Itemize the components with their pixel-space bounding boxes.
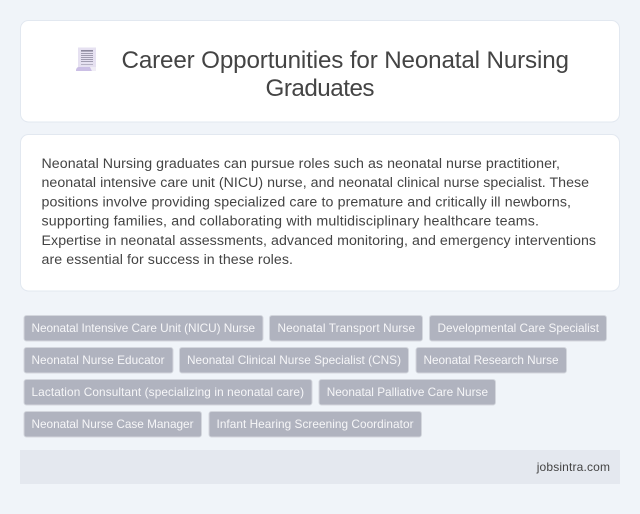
tag: case manager: Neonatal Nurse Case Manager	[32, 417, 194, 431]
tag: research nurse: Neonatal Research Nurse	[424, 353, 559, 367]
text block: description paragraph: supporting families, and collaborating with multidisciplinary healthcare teams.	[42, 214, 539, 230]
panel: description text card	[20, 134, 620, 291]
text block: description paragraph: positions involve providing specialized care to premature and critically ill newborns,	[42, 194, 571, 210]
text block: description paragraph: Neonatal Nursing graduates can pursue roles such as neonatal nurse practitioner,	[42, 156, 560, 172]
tag: research nurse	[416, 348, 566, 373]
icon: paper scroll document	[76, 48, 96, 71]
tag: nurse educator	[24, 348, 173, 373]
tag: NICU nurse	[24, 316, 263, 341]
tag: developmental care specialist	[430, 316, 606, 341]
title: Graduates	[266, 75, 374, 102]
title	[122, 47, 569, 102]
tag: clinical nurse specialist: Neonatal Clinical Nurse Specialist (CNS)	[187, 353, 401, 367]
tag: developmental care specialist: Developmental Care Specialist	[438, 321, 600, 335]
title: Career Opportunities for Neonatal Nursing	[122, 47, 569, 74]
tag: transport nurse: Neonatal Transport Nurse	[278, 321, 415, 335]
text block: description paragraph: neonatal intensive care unit (NICU) nurse, and neonatal clinical nurse specialist. These	[42, 175, 589, 191]
text block: description paragraph	[42, 156, 596, 268]
tag: palliative care nurse	[319, 380, 496, 405]
tag: palliative care nurse: Neonatal Palliative Care Nurse	[327, 385, 488, 399]
tag: NICU nurse: Neonatal Intensive Care Unit (NICU) Nurse	[32, 321, 255, 335]
tag: case manager	[24, 412, 202, 437]
tag: lactation consultant: Lactation Consultant (specializing in neonatal care)	[32, 385, 304, 399]
footer text: source site: jobsintra.com	[536, 460, 610, 474]
tag: hearing screening coordinator	[209, 412, 422, 437]
tag: clinical nurse specialist	[180, 348, 408, 373]
tag: nurse educator: Neonatal Nurse Educator	[32, 353, 165, 367]
tag: transport nurse	[270, 316, 422, 341]
panel: header card	[20, 20, 620, 122]
tag list: career roles	[24, 316, 606, 437]
footer bar	[20, 450, 620, 484]
text block: description paragraph: Expertise in neonatal assessments, advanced monitoring, and emergency interventions	[42, 233, 596, 249]
tag: hearing screening coordinator: Infant Hearing Screening Coordinator	[216, 417, 414, 431]
tag: lactation consultant	[24, 380, 312, 405]
text block: description paragraph: are essential for success in these roles.	[42, 252, 293, 268]
